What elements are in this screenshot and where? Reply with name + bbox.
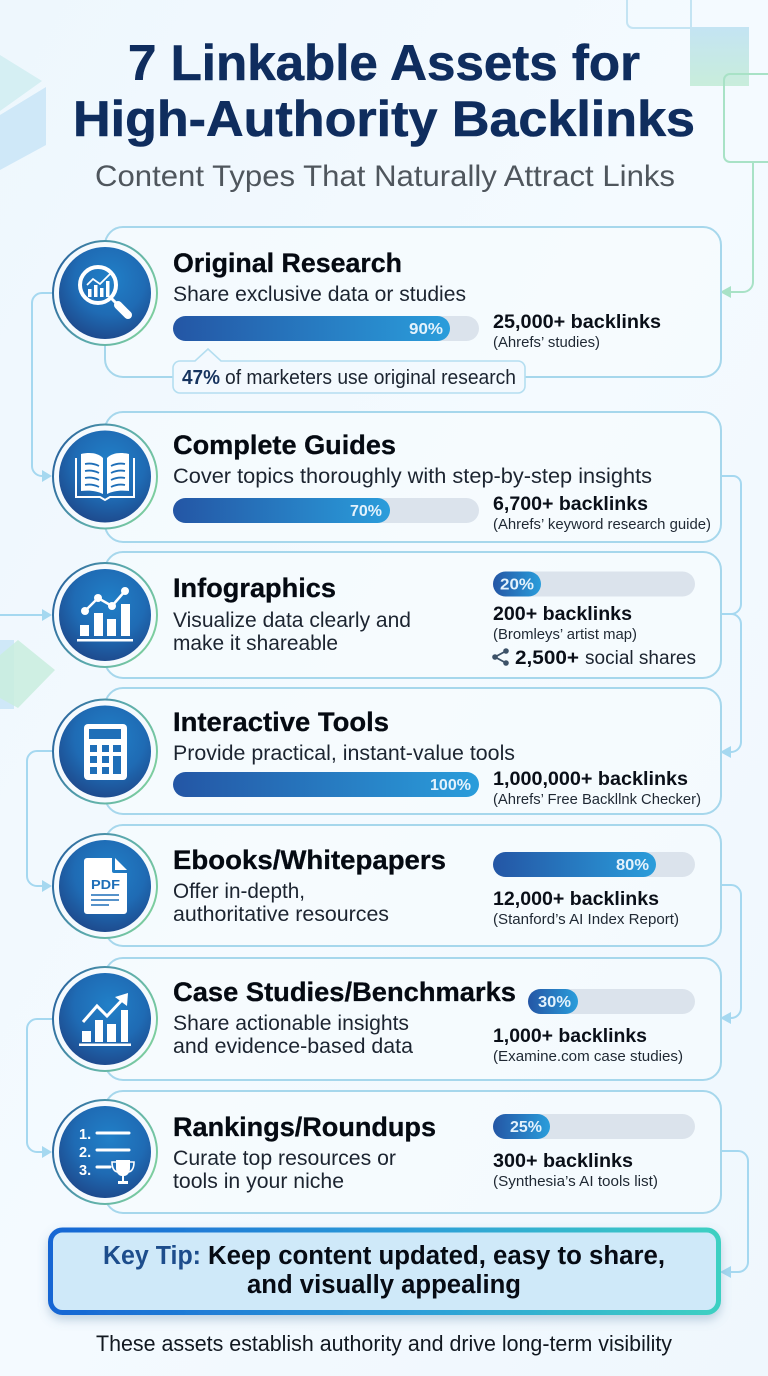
panel: Ebooks/Whitepapers: [53, 825, 721, 946]
icon: bar and line chart: [53, 563, 157, 667]
description: Provide practical, instant-value tools: [173, 742, 515, 765]
decorative shapes top right: [627, 0, 768, 162]
title: [73, 35, 695, 147]
callout: key tip: Keep content updated, easy to share,: [208, 1242, 665, 1270]
description: Curate top resources or: [173, 1147, 396, 1170]
stat: 25,000+ backlinks: [493, 312, 661, 333]
stat: 300+ backlinks: [493, 1151, 633, 1172]
progress bar 25%: [493, 1114, 695, 1139]
footer text: These assets establish authority and drive long-term visibility: [96, 1331, 672, 1356]
stat: 12,000+ backlinks: [493, 889, 659, 910]
callout: [173, 349, 525, 393]
icon: growth chart: [53, 967, 157, 1071]
callout: key tip: and visually appealing: [247, 1271, 521, 1299]
icon: PDF document: [53, 834, 157, 938]
stat: (Ahrefs’ Free Backllnk Checker): [493, 792, 701, 808]
progress bar 30%: [528, 989, 695, 1014]
decorative shapes middle left: [0, 640, 55, 709]
heading: Original Research: [173, 248, 402, 278]
stat: [493, 312, 661, 351]
arrow: connector into Original Research card: [720, 162, 753, 298]
panel: Infographics: [53, 552, 721, 678]
heading: Ebooks/Whitepapers: [173, 845, 446, 875]
heading: Complete Guides: [173, 430, 396, 460]
stat: 1,000,000+ backlinks: [493, 769, 688, 790]
stat: (Examine.com case studies): [493, 1049, 683, 1065]
arrow: Ebooks to Case Studies: [720, 885, 741, 1024]
arrow: into Infographics: [0, 609, 52, 621]
callout: 47%: [182, 367, 220, 389]
progress bar 80%: [493, 852, 695, 877]
icon: share: [492, 648, 509, 666]
stat: (Stanford’s AI Index Report): [493, 912, 679, 928]
description: [173, 609, 411, 655]
progress bar 30%: 30%: [538, 994, 571, 1011]
callout: key tip: Key Tip:: [103, 1242, 201, 1270]
icon: open book: [53, 424, 157, 528]
description: Share exclusive data or studies: [173, 283, 466, 306]
panel: Original Research: [53, 227, 721, 393]
social shares stat: [515, 648, 696, 669]
progress bar 90%: [173, 316, 479, 341]
title: 7 Linkable Assets for: [128, 35, 640, 91]
progress bar 100%: [173, 772, 479, 797]
panel: Interactive Tools: [53, 688, 721, 814]
icon: ranked list with trophy: 2.: [79, 1145, 91, 1161]
description: Offer in-depth,: [173, 880, 305, 903]
progress bar 100%: 100%: [430, 777, 471, 794]
description: and evidence-based data: [173, 1035, 413, 1058]
icon: ranked list with trophy: 1.: [79, 1127, 91, 1143]
description: make it shareable: [173, 632, 338, 655]
description: tools in your niche: [173, 1170, 344, 1193]
description: Visualize data clearly and: [173, 609, 411, 632]
arrow: Case Studies to Rankings: [27, 1019, 52, 1158]
description: [173, 1012, 413, 1058]
description: [173, 1147, 396, 1193]
progress bar 20%: [493, 572, 695, 596]
icon: ranked list with trophy: [53, 1100, 157, 1204]
stat: [493, 889, 679, 928]
panel: Case Studies/Benchmarks: [53, 958, 721, 1080]
icon: magnifier with chart: [53, 241, 157, 345]
subtitle: Content Types That Naturally Attract Links: [95, 160, 675, 193]
title: High-Authority Backlinks: [73, 91, 695, 147]
stat: [493, 1151, 658, 1190]
icon: calculator: [53, 700, 157, 804]
stat: 1,000+ backlinks: [493, 1026, 647, 1047]
progress bar 70%: [173, 498, 479, 523]
heading: Interactive Tools: [173, 707, 389, 737]
panel: Rankings/Roundups: [53, 1091, 721, 1213]
arrow: Rankings to Key Tip: [720, 1151, 748, 1278]
panel: Complete Guides: [53, 412, 721, 542]
callout: key tip: [50, 1230, 718, 1312]
description: authoritative resources: [173, 903, 389, 926]
arrow: Interactive Tools to Ebooks: [27, 751, 52, 892]
social shares stat: social shares: [585, 648, 696, 669]
arrow: Complete Guides to Infographics and Interactive Tools: [720, 476, 741, 758]
progress bar 80%: 80%: [616, 857, 649, 874]
description: Share actionable insights: [173, 1012, 409, 1035]
stat: 6,700+ backlinks: [493, 494, 648, 515]
callout: of marketers use original research: [225, 367, 516, 389]
description: Cover topics thoroughly with step-by-step insights: [173, 465, 652, 488]
stat: (Synthesia’s AI tools list): [493, 1174, 658, 1190]
stat: [493, 769, 701, 808]
arrow: Original Research to Complete Guides: [32, 293, 52, 482]
stat: [493, 1026, 683, 1065]
stat: [493, 604, 637, 643]
heading: Rankings/Roundups: [173, 1112, 436, 1142]
progress bar 25%: 25%: [510, 1119, 542, 1136]
icon: PDF document: PDF: [91, 878, 120, 892]
icon: ranked list with trophy: 3.: [79, 1163, 91, 1179]
heading: Case Studies/Benchmarks: [173, 977, 516, 1007]
stat: (Ahrefs’ keyword research guide): [493, 517, 711, 533]
progress bar 90%: 90%: [409, 321, 443, 338]
stat: [493, 494, 711, 533]
progress bar 70%: 70%: [350, 503, 382, 520]
stat: (Bromleys’ artist map): [493, 627, 637, 643]
heading: Infographics: [173, 573, 336, 603]
progress bar 20%: 20%: [500, 576, 534, 594]
description: [173, 880, 389, 926]
stat: (Ahrefs’ studies): [493, 335, 600, 351]
decorative shapes top left: [0, 55, 46, 170]
social shares stat: 2,500+: [515, 648, 579, 669]
stat: 200+ backlinks: [493, 604, 632, 625]
